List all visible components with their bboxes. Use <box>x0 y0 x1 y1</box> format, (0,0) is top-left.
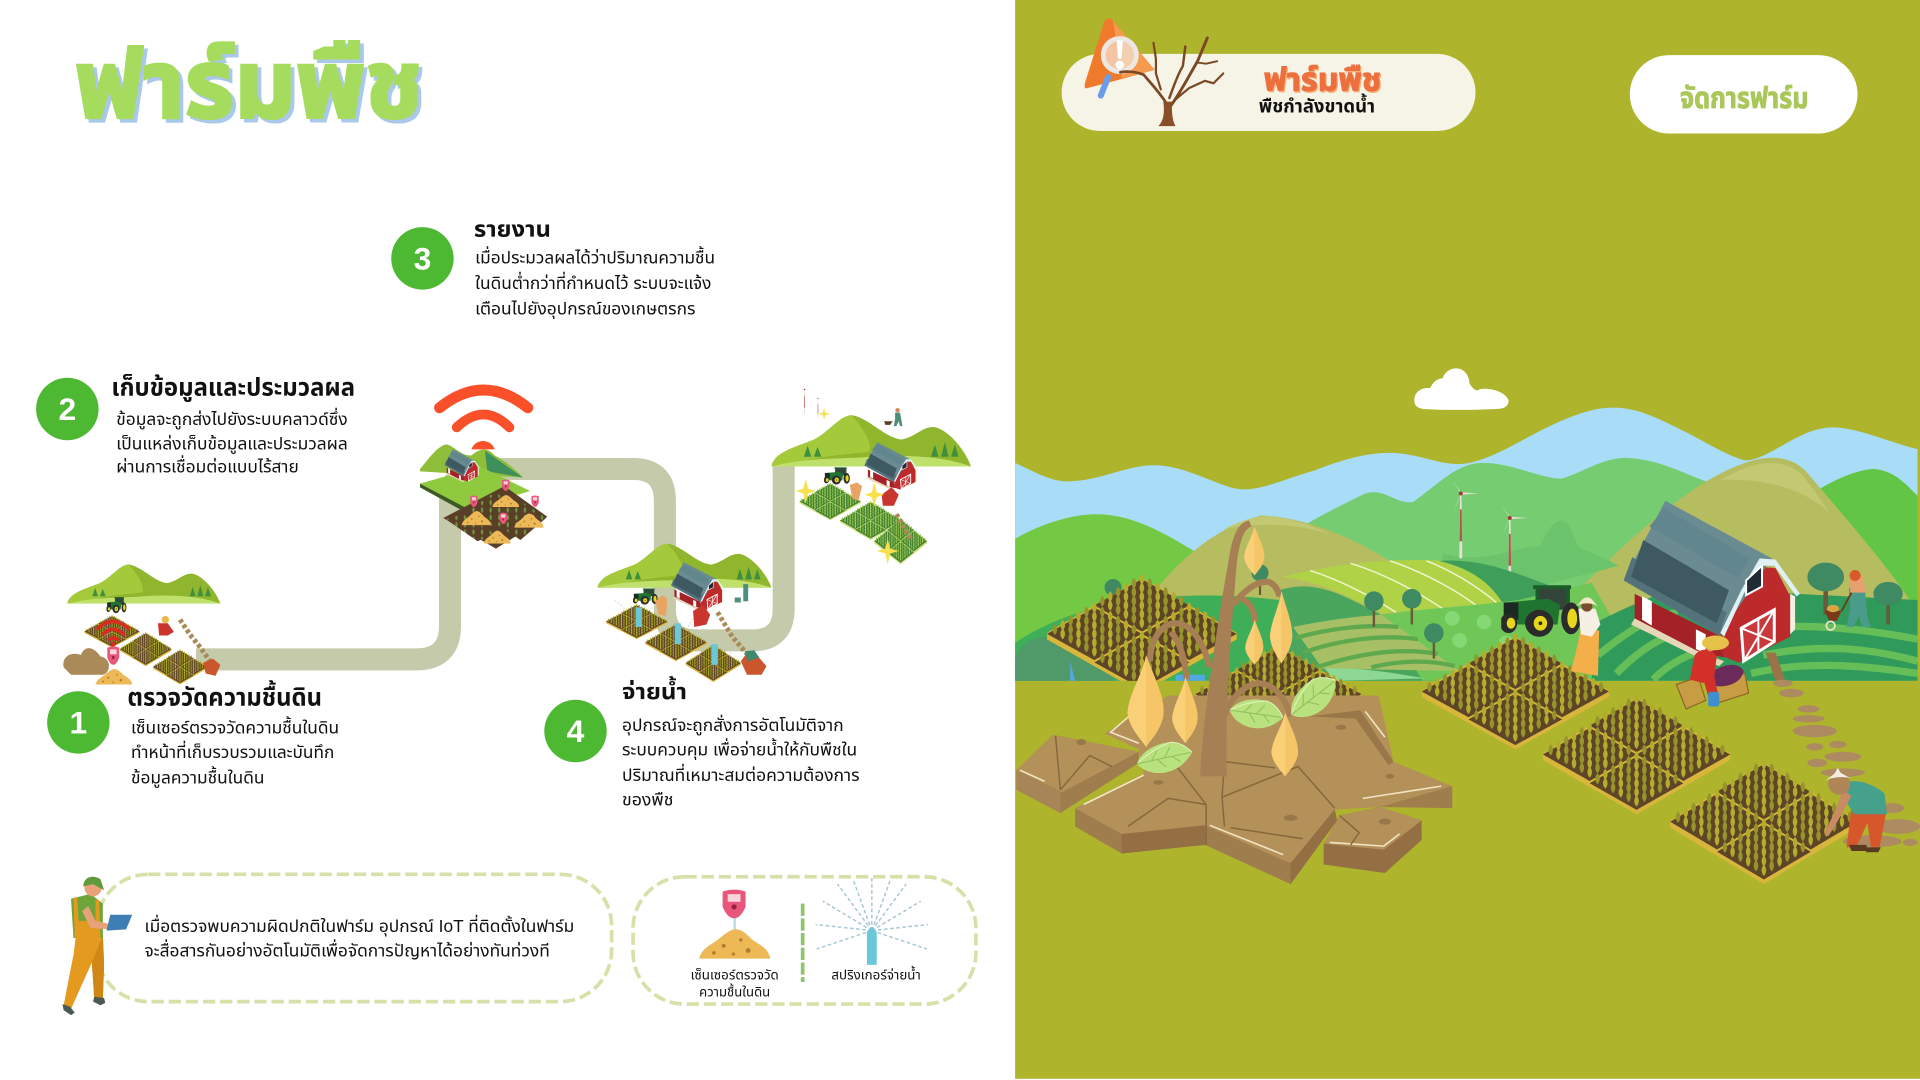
step 4 description <box>622 714 860 810</box>
icon: stepping stones path <box>1766 653 1920 847</box>
step 2 description: เป็นแหล่งเก็บข้อมูลและประมวลผล <box>116 433 348 455</box>
step 1 description: ทำหน้าที่เก็บรวบรวมและบันทึก <box>131 740 334 762</box>
step 1 number badge <box>47 691 110 754</box>
illustration: seated farmer with crate <box>1676 636 1749 709</box>
button: manage farm: จัดการฟาร์ม <box>1680 82 1809 115</box>
step 4 description: อุปกรณ์จะถูกสั่งการอัตโนมัติจาก <box>622 714 844 737</box>
step 2 description <box>116 407 348 477</box>
callout: IoT communication note <box>62 874 612 1015</box>
background: left white panel <box>0 0 1015 1080</box>
step 1 number badge: 1 <box>70 704 87 740</box>
panel: device legend <box>633 877 976 1004</box>
step 4 number badge <box>544 700 607 762</box>
dashed callout frame <box>97 874 612 1002</box>
step 2 description: ข้อมูลจะถูกส่งไปยังระบบคลาวด์ซึ่ง <box>116 407 348 431</box>
green healthy leaves <box>1134 668 1345 778</box>
dashed legend frame <box>633 877 976 1004</box>
step 1 description <box>131 716 339 790</box>
step 4 description: ของพืช <box>622 790 673 810</box>
yellow wilted leaves <box>1127 527 1298 776</box>
step 4: water supply <box>544 676 860 810</box>
pill title: ฟาร์มพืช <box>1265 63 1382 99</box>
callout text <box>144 914 574 960</box>
step 2: collect and process data <box>36 374 355 477</box>
step 2 number badge <box>36 378 99 440</box>
icon: dead tree <box>1120 38 1223 126</box>
panel: right farm scene background <box>1015 0 1920 1079</box>
illustration: man pushing wheelbarrow <box>1824 570 1871 630</box>
title: ฟาร์มพืช <box>75 33 422 139</box>
crop plots on the right <box>1422 632 1858 884</box>
sensor label: เซ็นเซอร์ตรวจวัด <box>691 968 779 983</box>
step 2 description: ผ่านการเชื่อมต่อแบบไร้สาย <box>116 455 299 477</box>
illustration: wilting plant <box>1127 520 1345 778</box>
icon: cloud <box>1414 368 1509 410</box>
illustration: tractor <box>1500 585 1581 637</box>
step 3 description <box>475 245 715 320</box>
icon: warning triangle with magnifier <box>1085 18 1155 96</box>
step 3 number badge: 3 <box>414 240 431 276</box>
sprinkler label: สปริงเกอร์จ่ายน้ำ <box>831 966 921 983</box>
icon: farmer with tablet <box>62 877 132 1015</box>
icon: sprinkler <box>816 878 928 965</box>
step 4 description: ปริมาณที่เหมาะสมต่อความต้องการ <box>622 763 860 785</box>
sensor label <box>691 968 779 1000</box>
mini farm 2: cloud data processing with wifi <box>420 390 547 549</box>
step 3: report <box>391 216 715 320</box>
title: ฟาร์มพืช <box>78 36 426 142</box>
process path connector <box>196 463 784 659</box>
crop plots behind dry soil <box>1046 574 1362 696</box>
step 1 description: ข้อมูลความชื้นในดิน <box>131 766 264 790</box>
landscape background <box>1015 408 1919 681</box>
pill subtitle: พืชกำลังขาดน้ำ <box>1259 93 1375 117</box>
step 3 heading: รายงาน <box>474 216 551 241</box>
step 2 heading: เก็บข้อมูลและประมวลผล <box>111 374 355 403</box>
icon: wifi signal <box>440 390 528 427</box>
step 1 description: เซ็นเซอร์ตรวจวัดความชื้นในดิน <box>131 716 339 737</box>
step 1: measure soil moisture <box>47 679 339 790</box>
step 4 description: ระบบควบคุม เพื่อจ่ายน้ำให้กับพืชใน <box>622 738 857 761</box>
mini farm 3: sprinklers watering <box>598 544 771 682</box>
mini farm 1: soil moisture sensor <box>63 564 220 684</box>
pill: crop water-shortage alert <box>1062 18 1476 131</box>
step 4 heading: จ่ายน้ำ <box>622 676 687 704</box>
illustration: farm barn <box>1624 501 1800 666</box>
callout text: จะสื่อสารกันอย่างอัตโนมัติเพื่อจัดการปัญหาได้อย่างทันท่วงที <box>144 938 550 960</box>
step 3 number badge <box>391 227 454 290</box>
step 4 number badge: 4 <box>567 713 585 749</box>
step 3 description: ในดินต่ำกว่าที่กำหนดไว้ ระบบจะแจ้ง <box>475 271 711 293</box>
step 1 heading: ตรวจวัดความชื้นดิน <box>127 679 322 711</box>
step 2 number badge: 2 <box>58 391 76 427</box>
pill title: ฟาร์มพืช <box>1264 62 1381 98</box>
sensor label: ความชื้นในดิน <box>699 983 770 1000</box>
illustration: woman with hat <box>1571 598 1600 676</box>
step 3 description: เมื่อประมวลผลได้ว่าปริมาณความชื้น <box>475 245 715 267</box>
callout text: เมื่อตรวจพบความผิดปกติในฟาร์ม อุปกรณ์ IoT ที่ติดตั้งในฟาร์ม <box>144 914 574 937</box>
icon: soil moisture sensor <box>699 890 770 959</box>
step 3 description: เตือนไปยังอุปกรณ์ของเกษตรกร <box>475 299 696 320</box>
button: manage farm <box>1630 55 1858 133</box>
illustration: dry cracked soil <box>1016 696 1452 884</box>
mini farm 4: irrigated healthy crops <box>771 384 971 564</box>
illustration: bending farmer <box>1824 768 1887 852</box>
